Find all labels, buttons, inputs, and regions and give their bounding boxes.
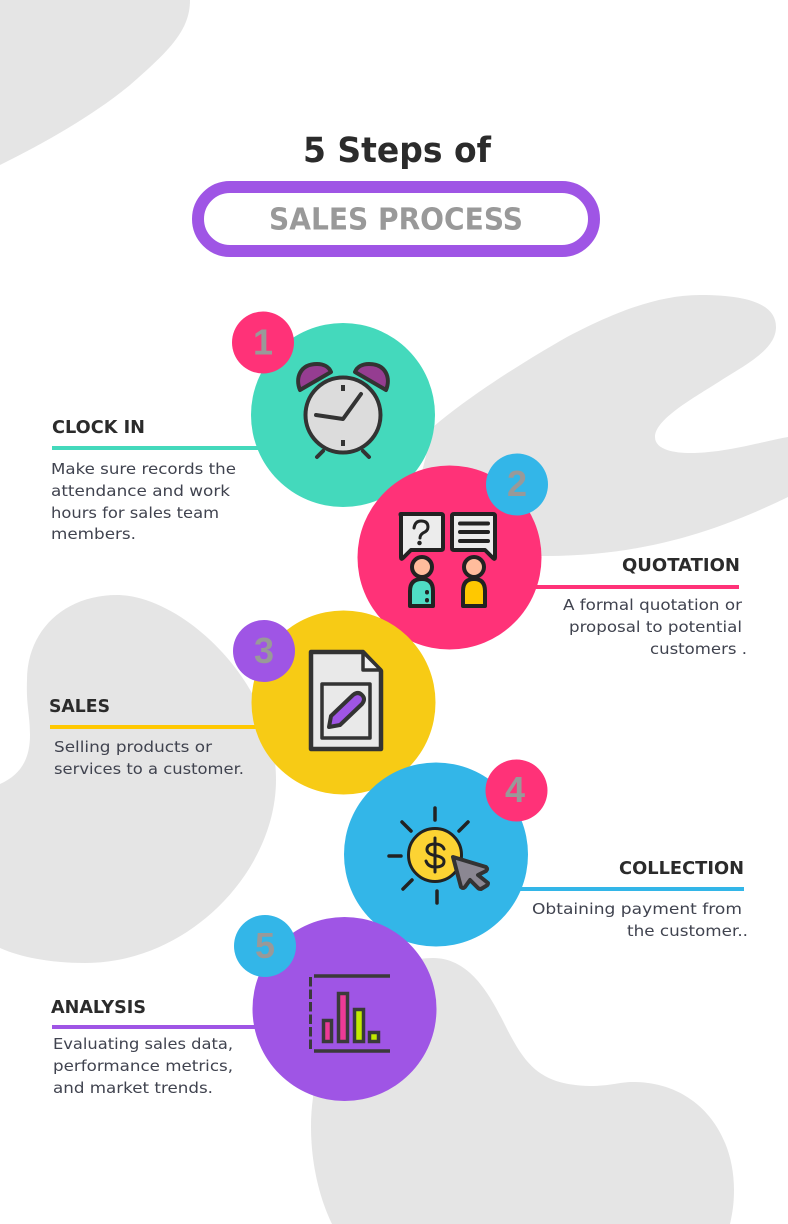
text block: clock in: CLOCK IN	[52, 418, 145, 438]
text block: quotation: customers .	[650, 640, 747, 658]
number badge 1: 1	[253, 322, 273, 362]
text block: analysis: ANALYSIS	[51, 998, 146, 1018]
number badge 4	[486, 760, 548, 822]
text block: clock in: hours for sales team	[51, 504, 219, 522]
number badge 1	[232, 312, 294, 374]
icon: bar chart	[310, 976, 390, 1051]
number badge 5	[234, 915, 296, 977]
number badge 3: 3	[254, 630, 274, 671]
title: 5 Steps of	[303, 131, 492, 171]
text block: quotation	[563, 556, 747, 658]
text block: quotation: QUOTATION	[622, 556, 740, 576]
connector line: analysis	[52, 1025, 262, 1029]
subtitle pill	[198, 187, 594, 251]
background blob: middle left	[0, 595, 276, 963]
text block: collection: the customer..	[627, 922, 748, 940]
text block: collection: COLLECTION	[619, 859, 744, 879]
icon: document with pencil	[311, 652, 381, 749]
connector line: sales	[50, 725, 260, 729]
text block: collection: Obtaining payment from	[532, 900, 742, 918]
icon: coin with cursor	[389, 808, 488, 903]
text block: quotation: proposal to potential	[569, 618, 742, 636]
text block: clock in: members.	[51, 525, 136, 543]
step 2: circle	[358, 466, 542, 650]
text block: collection	[532, 859, 748, 940]
step 5: circle	[252, 917, 436, 1101]
text block: clock in: Make sure records the	[51, 460, 236, 478]
number badge 5: 5	[255, 925, 275, 966]
connector line: quotation	[530, 585, 739, 589]
text block: analysis: Evaluating sales data,	[53, 1035, 233, 1053]
step 4: circle	[344, 762, 528, 946]
number badge 4: 4	[505, 769, 525, 810]
background blob: middle right	[420, 295, 788, 556]
icon: two people with speech bubbles	[400, 514, 495, 606]
number badge 3	[233, 620, 295, 682]
text block: analysis: and market trends.	[53, 1079, 213, 1097]
step 1: circle	[251, 323, 435, 507]
text block: clock in: attendance and work	[51, 482, 230, 500]
icon: alarm clock	[298, 364, 388, 457]
text block: sales: SALES	[49, 697, 110, 717]
step 3: circle	[252, 610, 436, 794]
background blob: bottom	[311, 958, 734, 1224]
connector line: collection	[518, 887, 744, 891]
background blob: top left	[0, 0, 190, 165]
text block: sales: services to a customer.	[54, 760, 244, 778]
text block: sales: Selling products or	[54, 738, 213, 756]
text block: analysis	[51, 998, 233, 1097]
text block: sales	[49, 697, 244, 778]
connector line: clock in	[52, 446, 262, 450]
subtitle pill: SALES PROCESS	[269, 202, 523, 238]
number badge 2	[486, 454, 548, 516]
text block: quotation: A formal quotation or	[563, 596, 743, 614]
number badge 2: 2	[507, 463, 527, 504]
text block: analysis: performance metrics,	[53, 1057, 233, 1075]
text block: clock in	[51, 418, 236, 543]
